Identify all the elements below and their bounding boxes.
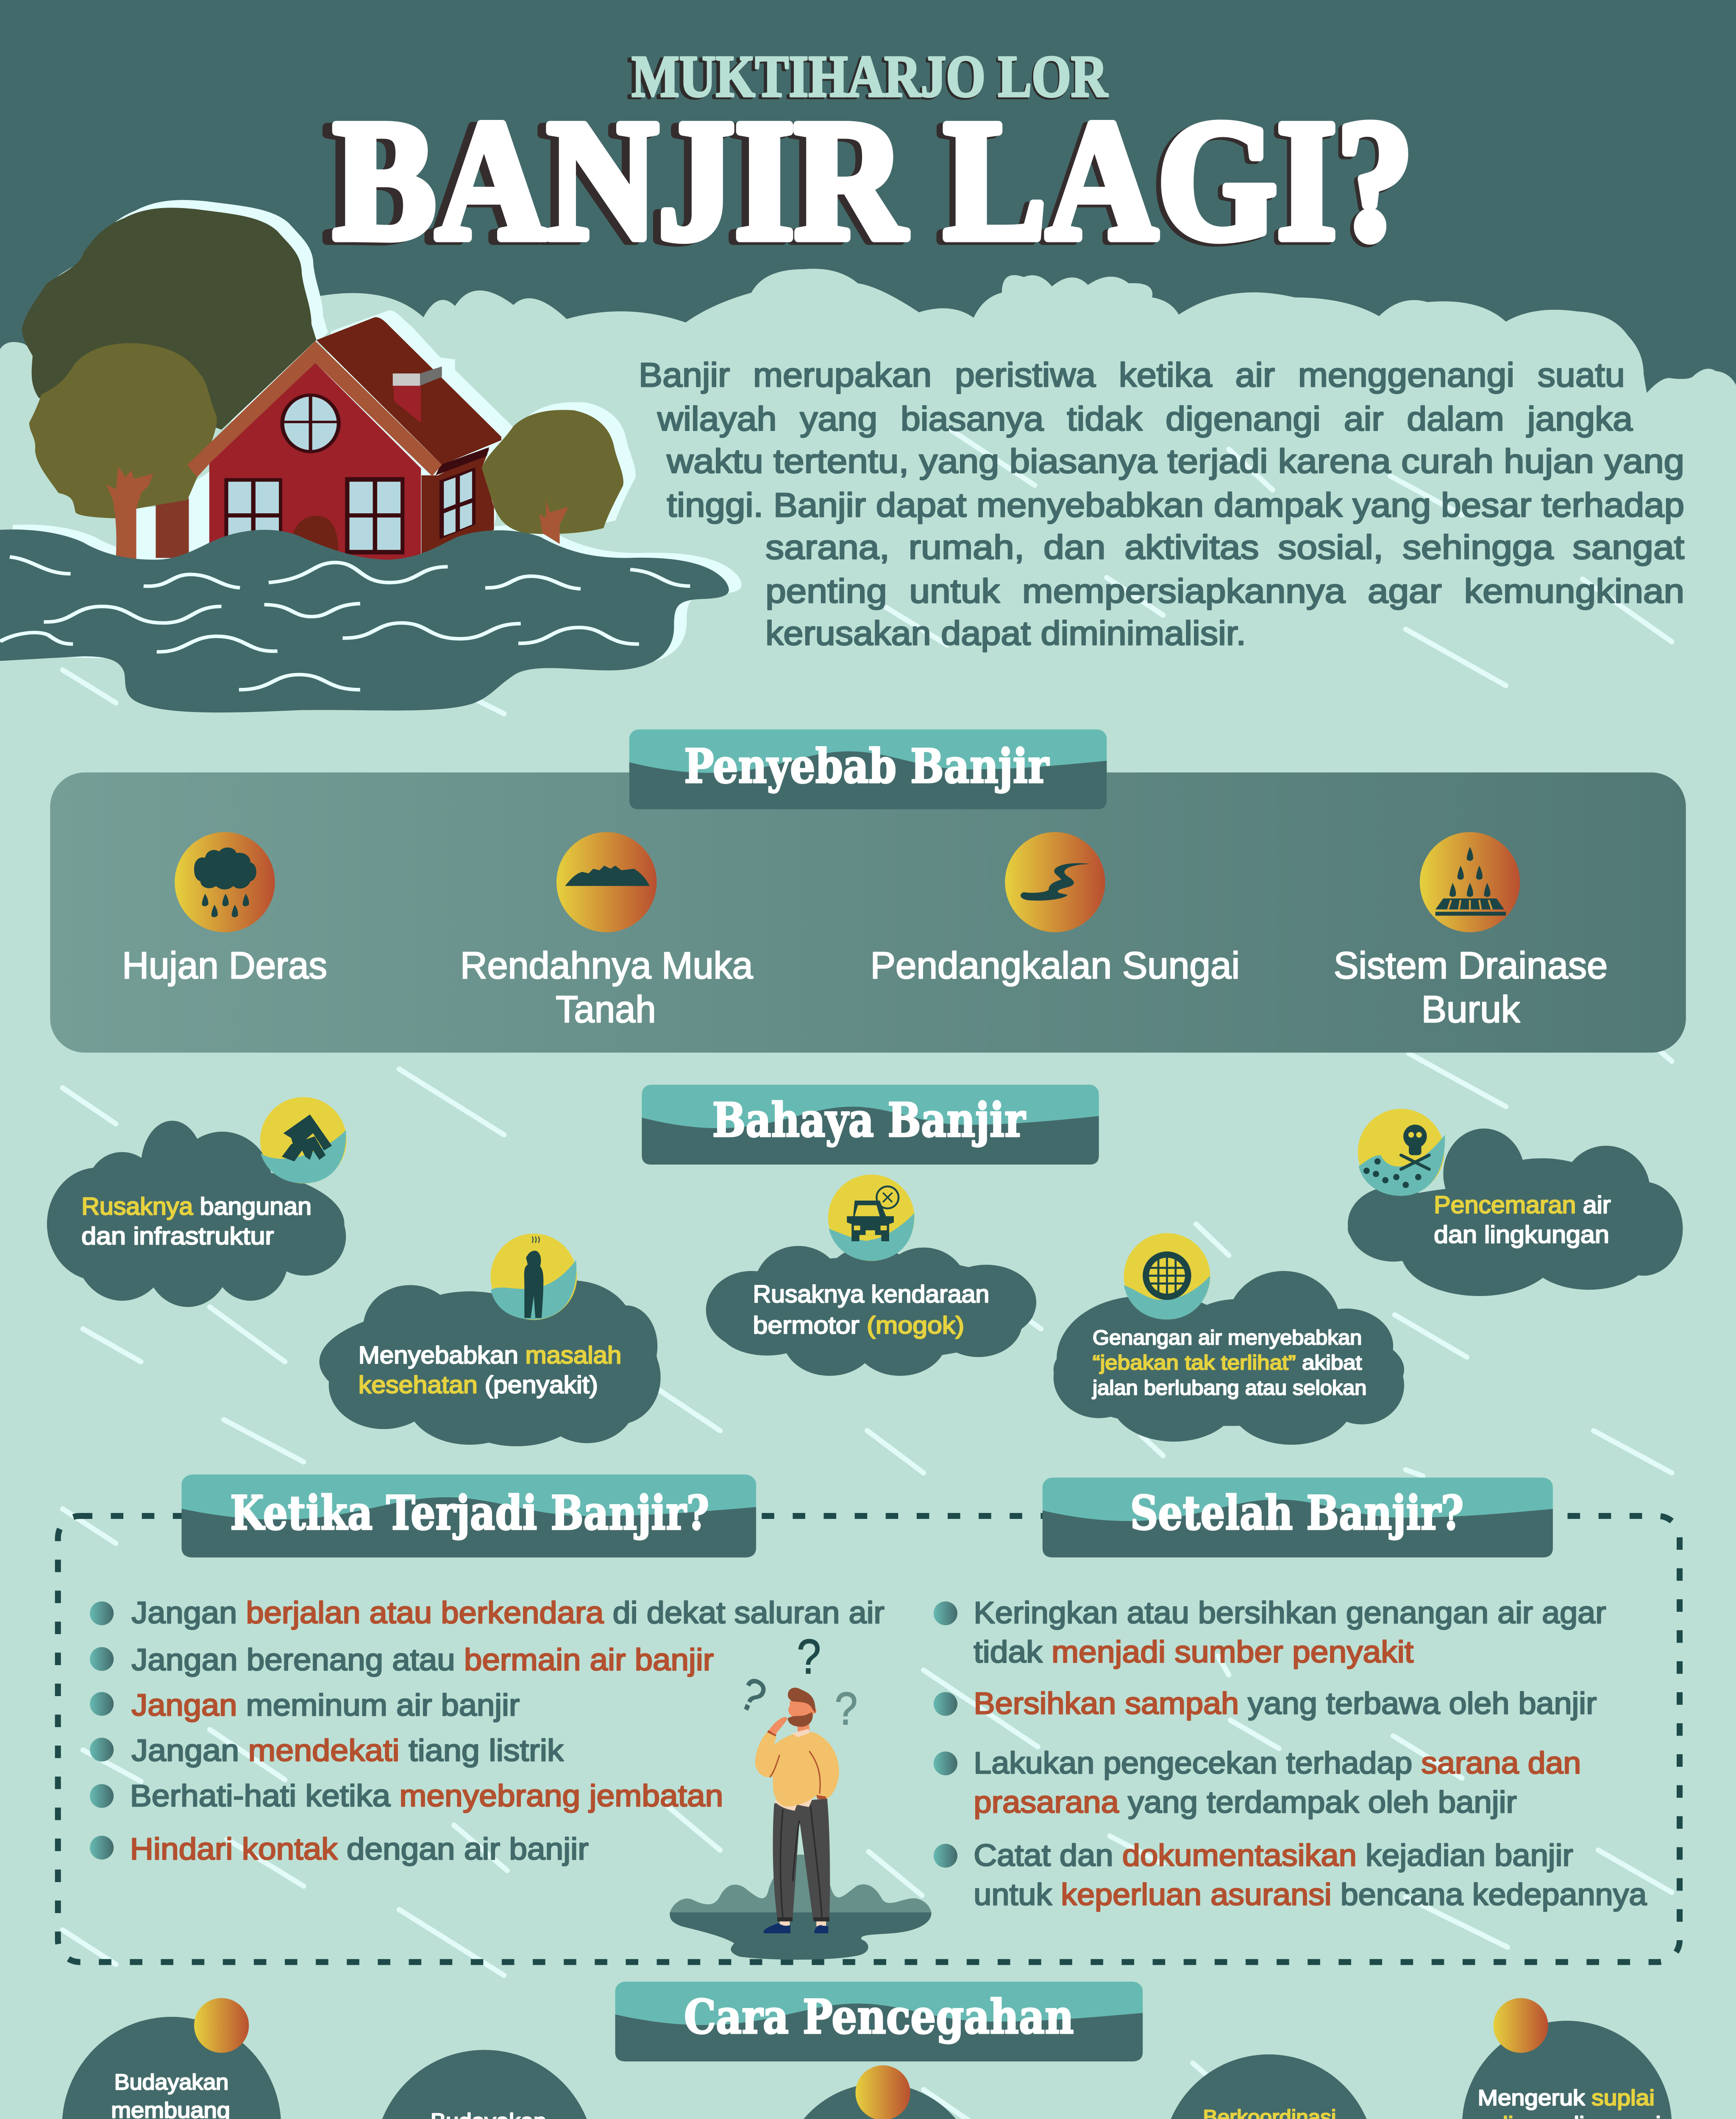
- list: setelah banjir: [934, 1596, 1647, 1912]
- callout: pencemaran: [1348, 1109, 1683, 1296]
- shoes: [763, 1923, 828, 1933]
- cloud shape: [1348, 1129, 1683, 1296]
- callout: rusaknya kendaraan: [706, 1175, 1036, 1376]
- house: [187, 317, 501, 562]
- cloud shape: [1054, 1271, 1404, 1445]
- top dark cloud sky: [0, 0, 1736, 393]
- cuff: [768, 1731, 776, 1735]
- right window: [345, 477, 404, 554]
- list text: Catat dan dokumentasikan kejadian banjir: [974, 1839, 1573, 1873]
- blob text: [1470, 2086, 1661, 2119]
- small tree halo: [494, 402, 636, 526]
- icon: poor drainage: [1420, 832, 1520, 932]
- intro paragraph: penting untuk mempersiapkannya agar kemungkinan: [765, 572, 1684, 610]
- prevention blob 3: [779, 2065, 980, 2119]
- bullets: [90, 1602, 114, 1860]
- callout text: Menyebabkan masalah: [359, 1342, 621, 1369]
- shirt hem: [774, 1793, 815, 1811]
- blob text: Budayakan: [114, 2070, 228, 2094]
- list text: Keringkan atau bersihkan genangan air agar: [974, 1596, 1606, 1630]
- ankles: [779, 1922, 826, 1926]
- intro paragraph: kerusakan dapat diminimalisir.: [765, 615, 1246, 652]
- heading: bahaya banjir: Bahaya Banjir: [712, 1093, 1026, 1148]
- dashed frame: [58, 1516, 1680, 1962]
- icon: pollution skull: [1358, 1109, 1445, 1196]
- main title: Banjir Lagi?: BANJIR LAGI?: [334, 84, 1413, 275]
- side window: [440, 467, 476, 539]
- callout text: [359, 1342, 621, 1399]
- water ripples: [0, 557, 690, 690]
- intro paragraph: tinggi. Banjir dapat menyebabkan dampak yang besar terhadap: [667, 486, 1684, 524]
- list text: Berhati-hati ketika menyebrang jembatan: [130, 1779, 723, 1813]
- callout text: Pencemaran air: [1434, 1191, 1611, 1218]
- panel background: [50, 773, 1686, 1053]
- callout text: [1434, 1191, 1611, 1249]
- left window: [224, 478, 282, 538]
- round window: [280, 393, 341, 453]
- callout text: [81, 1193, 312, 1250]
- list text: Jangan mendekati tiang listrik: [131, 1734, 564, 1768]
- heading: cara pencegahan: Cara Pencegahan: [684, 1990, 1074, 2045]
- heading: ketika terjadi banjir: Ketika Terjadi Banjir?: [230, 1485, 709, 1541]
- icon: winding river: [1005, 832, 1105, 932]
- cloud shape: [319, 1280, 661, 1446]
- rain streaks: [63, 431, 1672, 2119]
- callout text: “jebakan tak terlihat” akibat: [1093, 1352, 1362, 1374]
- panel: penyebab banjir: [50, 773, 1686, 1053]
- icon: broken car: [828, 1175, 915, 1261]
- heading: penyebab banjir: [629, 729, 1107, 809]
- water halo: [13, 525, 742, 665]
- callout text: Genangan air menyebabkan: [1093, 1327, 1362, 1349]
- title block: [324, 44, 1413, 278]
- gold dot: [1494, 1998, 1548, 2053]
- puddle front: [670, 1912, 932, 1960]
- heading: setelah banjir: Setelah Banjir?: [1130, 1485, 1463, 1541]
- list text: untuk keperluan asuransi bencana kedepannya: [974, 1878, 1647, 1912]
- icon: heavy rain: [175, 832, 275, 932]
- heading: penyebab banjir: Penyebab Banjir: [684, 739, 1049, 794]
- right roof: [316, 317, 501, 465]
- prevention blob 1: [62, 1998, 281, 2119]
- illustration: confused man: ?: [835, 1682, 857, 1734]
- gold dot: [194, 1998, 249, 2053]
- sleeve pocket: [816, 1795, 826, 1799]
- gold dot: [855, 2065, 910, 2119]
- intro paragraph: wilayah yang biasanya tidak digenangi air dalam jangka: [657, 400, 1633, 438]
- callout: rusaknya bangunan: [47, 1097, 347, 1307]
- heading: bahaya banjir: [642, 1085, 1099, 1165]
- door: [292, 516, 338, 551]
- heading: ketika terjadi banjir: [181, 1474, 756, 1557]
- callout text: [753, 1281, 989, 1339]
- hand: [769, 1717, 787, 1735]
- front wall: [209, 363, 421, 562]
- callout text: [1092, 1327, 1366, 1399]
- heading: cara pencegahan: [615, 1982, 1143, 2061]
- chimney: [393, 386, 421, 423]
- callout: jebakan tak terlihat: [1054, 1233, 1404, 1445]
- eave shadow: [436, 447, 489, 476]
- blob text: [84, 2070, 257, 2119]
- label: rendahnya muka tanah: [460, 944, 753, 1030]
- illustration: confused man: ?: [733, 1666, 773, 1724]
- list text: Hindari kontak dengan air banjir: [130, 1833, 589, 1866]
- main title: Banjir Lagi?: BANJIR LAGI?: [324, 87, 1410, 278]
- big tree halo: [33, 200, 328, 422]
- list text: [974, 1596, 1647, 1912]
- icon: sick person: [491, 1234, 577, 1320]
- right trunk: [539, 500, 568, 544]
- big dark tree: [22, 208, 316, 430]
- beard: [787, 1712, 812, 1727]
- label: pendangkalan sungai: Pendangkalan Sungai: [871, 944, 1240, 986]
- label: hujan deras: Hujan Deras: [122, 944, 327, 986]
- puddle back: [670, 1855, 932, 1913]
- illustration: flooded house: [0, 200, 742, 712]
- stripes behind: [156, 498, 189, 558]
- hair: [788, 1688, 815, 1713]
- trousers: [773, 1799, 830, 1920]
- callout text: bermotor (mogok): [753, 1312, 964, 1339]
- flood water: [0, 529, 729, 712]
- left trunk: [106, 467, 153, 560]
- callout: masalah kesehatan: [319, 1234, 661, 1446]
- collar: [792, 1729, 810, 1737]
- label: rendahnya muka tanah: Rendahnya Muka: [460, 944, 753, 986]
- icon: damaged house: [260, 1097, 347, 1184]
- roof trim: [187, 341, 442, 477]
- illustration: confused man: [670, 1630, 932, 1960]
- list text: [130, 1596, 885, 1866]
- label: sistem drainase buruk: Sistem Drainase: [1334, 944, 1608, 986]
- list text: Jangan berenang atau bermain air banjir: [131, 1643, 714, 1677]
- blob text: Mengeruk suplai: [1478, 2086, 1655, 2110]
- prevention blob 5: [1462, 1998, 1672, 2119]
- callout text: jalan berlubang atau selokan: [1092, 1377, 1366, 1399]
- intro paragraph: sarana, rumah, dan aktivitas sosial, sehingga sangat: [765, 528, 1684, 566]
- side wall: [421, 449, 494, 558]
- left olive tree: [29, 343, 217, 518]
- intro paragraph: Banjir merupakan peristiwa ketika air menggenangi suatu: [639, 356, 1625, 394]
- cloud shape: [706, 1246, 1036, 1376]
- list text: Jangan meminum air banjir: [131, 1688, 520, 1722]
- subtitle: Muktiharjo Lor: MUKTIHARJO LOR: [632, 44, 1108, 109]
- list text: prasarana yang terdampak oleh banjir: [974, 1785, 1517, 1819]
- house halo: [292, 310, 535, 556]
- intro paragraph: [639, 356, 1684, 652]
- prevention blob 4: [1162, 2055, 1375, 2119]
- icon: low land: [556, 832, 657, 932]
- question marks: ?: [797, 1630, 821, 1684]
- callout text: kesehatan (penyakit): [359, 1371, 598, 1399]
- list: ketika terjadi banjir: [90, 1596, 885, 1866]
- right olive tree: [481, 410, 623, 534]
- list text: Jangan berjalan atau berkendara di dekat saluran air: [131, 1596, 885, 1630]
- prevention blob 2: [374, 2050, 595, 2119]
- label: rendahnya muka tanah: Tanah: [556, 988, 656, 1030]
- callout text: Rusaknya bangunan: [81, 1193, 312, 1220]
- label: sistem drainase buruk: [1334, 944, 1608, 1030]
- head: [788, 1701, 813, 1723]
- callout text: dan infrastruktur: [81, 1223, 274, 1250]
- subtitle: Muktiharjo Lor: MUKTIHARJO LOR: [628, 45, 1107, 111]
- callout text: dan lingkungan: [1434, 1221, 1609, 1249]
- sweater: [755, 1732, 839, 1807]
- list text: Lakukan pengecekan terhadap sarana dan: [974, 1746, 1581, 1780]
- icon: manhole grate: [1124, 1233, 1210, 1320]
- bullets: [934, 1602, 957, 1868]
- list text: Bersihkan sampah yang terbawa oleh banjir: [974, 1687, 1597, 1721]
- neck: [797, 1723, 810, 1733]
- cloud shape: [47, 1121, 346, 1307]
- callout text: Rusaknya kendaraan: [753, 1281, 989, 1308]
- heading: setelah banjir: [1043, 1478, 1553, 1557]
- label: sistem drainase buruk: Buruk: [1422, 988, 1520, 1030]
- intro paragraph: waktu tertentu, yang biasanya terjadi karena curah hujan yang: [666, 442, 1684, 480]
- list text: tidak menjadi sumber penyakit: [974, 1635, 1413, 1669]
